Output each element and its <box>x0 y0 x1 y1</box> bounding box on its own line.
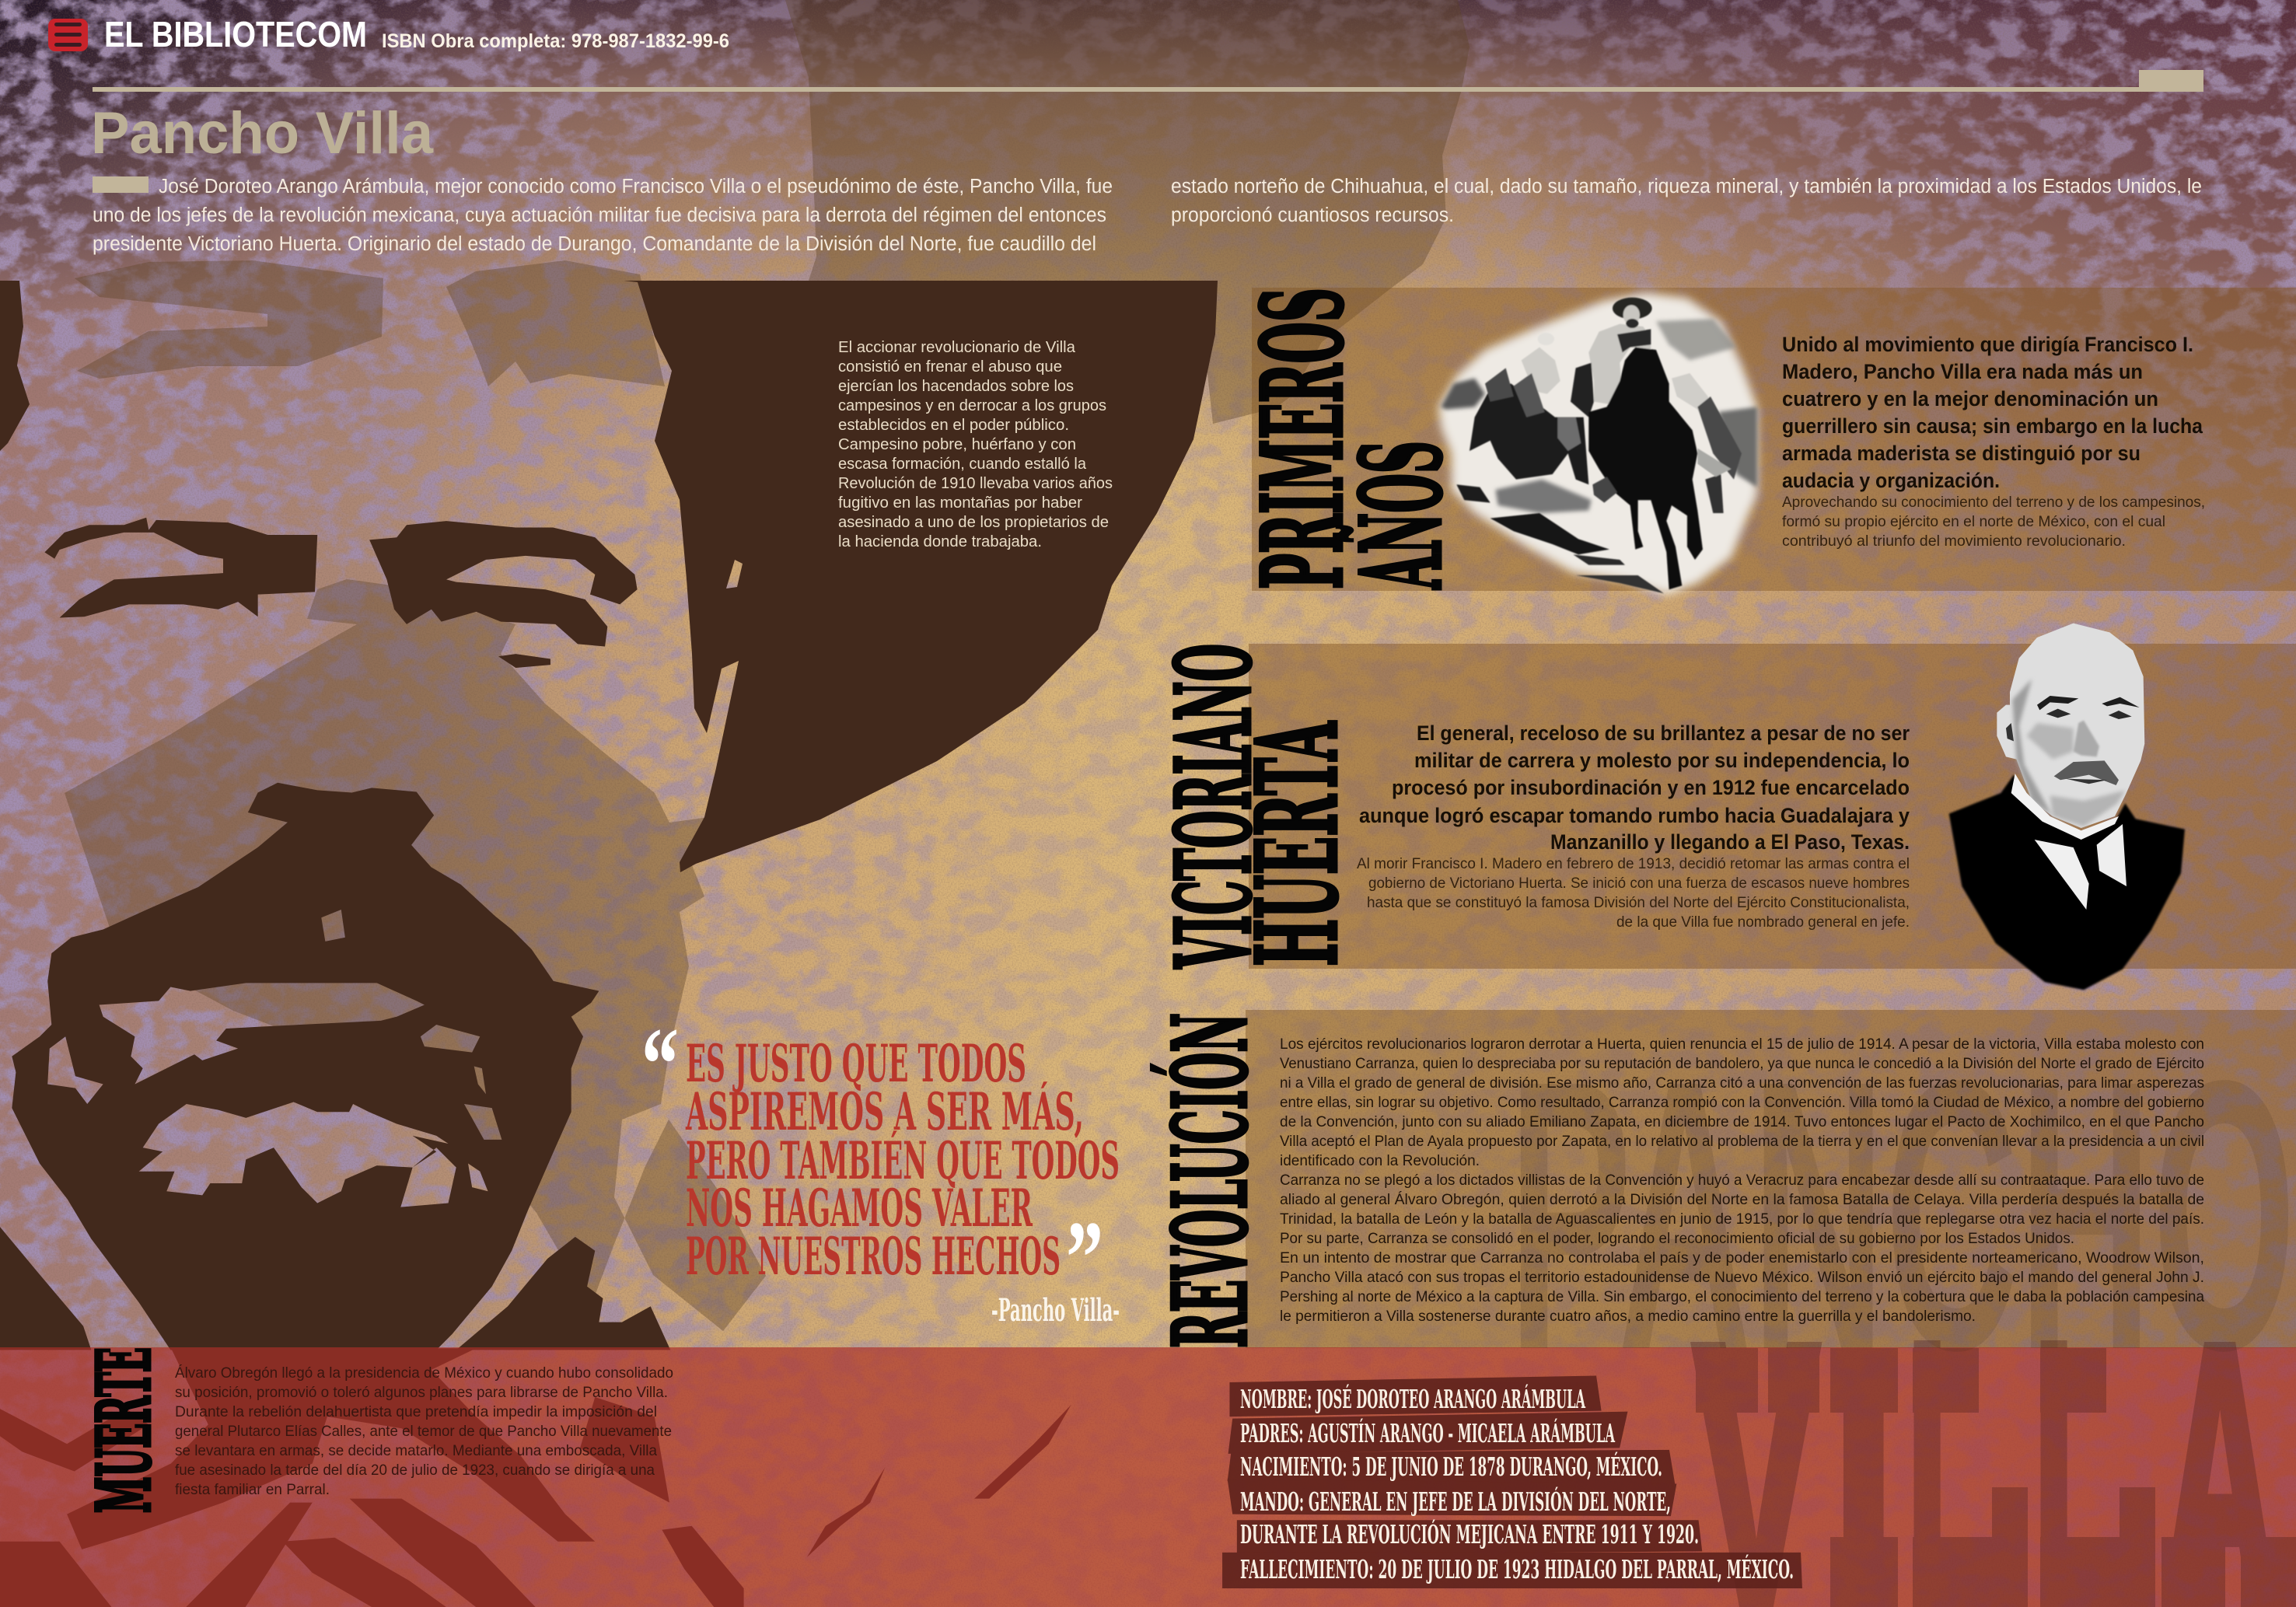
text block on dark shape <box>838 338 1113 550</box>
text: victoriano huerta: Manzanillo y llegando a El Paso, Texas. <box>1550 830 1910 854</box>
text block on dark shape: asesinado a uno de los propietarios de <box>838 513 1109 531</box>
text: MUERTE <box>82 1347 167 1513</box>
photo: Pancho Villa on horseback <box>1438 293 1757 595</box>
hat and cheek shadow <box>624 281 1218 872</box>
heading: victoriano huerta: HUERTA <box>1233 721 1362 966</box>
face illustration: dark silhouette <box>0 281 1218 1607</box>
fact sheet: DURANTE LA REVOLUCIÓN MEJICANA ENTRE 1911 Y 1920. <box>1240 1518 1699 1549</box>
text block on dark shape: la hacienda donde trabajaba. <box>838 533 1042 550</box>
quote: PERO TAMBIÉN QUE TODOS <box>686 1130 1120 1191</box>
text block on dark shape: Revolución de 1910 llevaba varios años <box>838 474 1113 492</box>
text: primeros años: contribuyó al triunfo del movimiento revolucionario. <box>1782 533 2126 550</box>
text: primeros años: formó su propio ejército en el norte de México, con el cual <box>1782 513 2165 530</box>
text: primeros años: Unido al movimiento que dirigía Francisco I. <box>1782 333 2193 356</box>
red band <box>0 1347 2296 1607</box>
fact sheet: MANDO: GENERAL EN JEFE DE LA DIVISIÓN DEL NORTE, <box>1240 1486 1671 1517</box>
text: victoriano huerta: de la que Villa fue nombrado general en jefe. <box>1616 914 1910 931</box>
text: revolución: aliado al general Álvaro Obregón, quien derrotó a la División del Norte en la famosa Batalla de Celaya. Villa perdería después la batalla de <box>1280 1190 2204 1208</box>
text block on dark shape: fugitivo en las montañas por haber <box>838 494 1082 512</box>
text block on dark shape: consistió en frenar el abuso que <box>838 358 1062 376</box>
collar left <box>0 1227 91 1350</box>
watermark: Villa <box>1693 1266 2296 1607</box>
quote: POR NUESTROS HECHOS <box>686 1226 1061 1287</box>
text: revolución: En un intento de mostrar que Carranza no controlaba el país y de poder enemistarlo con el presidente norteamericano, Woodrow Wilson, <box>1280 1249 2204 1266</box>
text: primeros años: armada maderista se distinguió por su <box>1782 442 2140 465</box>
text: revolución: identificado con la Revolución. <box>1280 1152 1480 1169</box>
fact sheet: FALLECIMIENTO: 20 DE JULIO DE 1923 HIDALGO DEL PARRAL, MÉXICO. <box>1240 1553 1794 1584</box>
intro paragraph: proporcionó cuantiosos recursos. <box>1171 204 1454 226</box>
quote: ” <box>1066 1200 1103 1316</box>
text block on dark shape: El accionar revolucionario de Villa <box>838 338 1076 356</box>
text: revolución: Trinidad, la batalla de León y la batalla de Aguascalientes en junio de 1915, por lo que tendría que replegarse otra vez hacia el norte del país. <box>1280 1210 2204 1228</box>
right eyebrow and eye <box>369 521 638 668</box>
text: victoriano huerta <box>1357 721 1910 931</box>
fact sheet: PADRES: AGUSTÍN ARANGO - MICAELA ARÁMBULA <box>1240 1417 1615 1448</box>
face illustration: mid tone shadows <box>65 0 1470 1331</box>
text block on dark shape: establecidos en el poder público. <box>838 416 1069 434</box>
fact sheet: NOMBRE: JOSÉ DOROTEO ARANGO ARÁMBULA <box>1240 1383 1585 1414</box>
intro paragraph: José Doroteo Arango Arámbula, mejor conocido como Francisco Villa o el pseudónimo de éste, Pancho Villa, fue <box>159 176 1113 197</box>
text: victoriano huerta: gobierno de Victoriano Huerta. Se inició con una fuerza de escasos nueve hombres <box>1368 875 1910 892</box>
fact sheet <box>1222 1375 1802 1588</box>
intro paragraph: estado norteño de Chihuahua, el cual, dado su tamaño, riqueza mineral, y también la proximidad a los Estados Unidos, le <box>1171 176 2202 197</box>
text: revolución: Pershing al norte de México a la captura de Villa. Sin embargo, el conocimiento del terreno y la cobertura que le daba la población campesina <box>1280 1288 2204 1305</box>
text: muerte: fue asesinado la tarde del día 20 de julio de 1923, cuando se dirigía a una <box>175 1462 655 1479</box>
header rule <box>93 70 2203 92</box>
text: victoriano huerta: militar de carrera y molesto por su independencia, lo <box>1414 749 1910 772</box>
text block on dark shape: ejercían los hacendados sobre los <box>838 377 1074 395</box>
text: revolución: de la Convención, junto con su aliado Emiliano Zapata, en diciembre de 1914. Tuvo entonces lugar el Pacto de Xochimilco, en el que Pancho <box>1280 1113 2204 1130</box>
panel: victoriano huerta background <box>1249 644 2296 969</box>
text: revolución: Venustiano Carranza, quien lo despreciaba por su reputación de bandolero, ya que nunca le concedió a la División del Norte el grado de Ejército <box>1280 1055 2204 1072</box>
text: revolución: Los ejércitos revolucionarios lograron derrotar a Huerta, quien renuncia el 15 de julio de 1914. A pesar de la victoria, Villa estaba molesto con <box>1280 1036 2204 1053</box>
text: victoriano huerta: hasta que se constituyó la famosa División del Norte del Ejército Constitucionalista, <box>1367 894 1910 911</box>
text: victoriano huerta: aunque logró escapar tomando rumbo hacia Guadalajara y <box>1359 804 1910 827</box>
text: muerte: fiesta familiar en Parral. <box>175 1481 330 1498</box>
text: primeros años <box>1782 333 2205 550</box>
text: muerte: se levantara en armas, se decide matarlo. Mediante una emboscada, Villa <box>175 1442 657 1459</box>
collar right <box>456 1237 670 1350</box>
fact sheet: NACIMIENTO: 5 DE JUNIO DE 1878 DURANGO, MÉXICO. <box>1240 1451 1662 1482</box>
text: revolución: Por su parte, Carranza se consolidó en el poder, logrando el reconocimiento oficial de su gobierno por los Estados Unidos. <box>1280 1230 2074 1247</box>
quote: NOS HAGAMOS VALER <box>686 1178 1033 1238</box>
text: revolución: Pancho Villa atacó con sus tropas el territorio estadounidense de Nuevo México. Wilson envió un ejército bajo el mando del general John J. <box>1280 1269 2204 1286</box>
quote <box>641 1007 1120 1329</box>
text: victoriano huerta: El general, receloso de su brillantez a pesar de no ser <box>1417 721 1910 745</box>
text: muerte: general Plutarco Elías Calles, ante el temor de que Pancho Villa nuevamente <box>175 1423 672 1440</box>
text: revolución: Villa aceptó el Plan de Ayala propuesto por Zapata, en lo relativo al problema de la tierra y en el que convenían llevar a la presidencia a un civil <box>1280 1133 2204 1150</box>
header: logo icon <box>48 19 88 51</box>
heading: primeros años <box>1239 288 1466 590</box>
text: primeros años: guerrillero sin causa; sin embargo en la lucha <box>1782 414 2203 438</box>
intro paragraph: uno de los jefes de la revolución mexicana, cuya actuación militar fue decisiva para la derrota del régimen del entonces <box>93 204 1106 226</box>
moustache and beard <box>0 783 670 1350</box>
quote: “ <box>641 1007 679 1123</box>
text: muerte <box>175 1364 673 1498</box>
text: VICTORIANO <box>1154 644 1274 969</box>
quote: ASPIREMOS A SER MÁS, <box>685 1081 1084 1142</box>
text: muerte: Álvaro Obregón llegó a la presidencia de México y cuando hubo consolidado <box>175 1364 673 1382</box>
intro paragraph: presidente Victoriano Huerta. Originario del estado de Durango, Comandante de la División del Norte, fue caudillo del <box>93 233 1096 255</box>
text: primeros años: Aprovechando su conocimiento del terreno y de los campesinos, <box>1782 494 2205 511</box>
left eyebrow and eye <box>44 518 317 618</box>
panel: primeros años background <box>1252 288 2296 591</box>
text: revolución: Carranza no se plegó a los dictados villistas de la Convención y huyó a Veracruz para encabezar desde allí su contraataque. Para ello tuvo de <box>1280 1172 2204 1189</box>
text: REVOLUCIÓN <box>1151 1013 1270 1348</box>
text: revolución: le permitieron a Villa sostenerse durante cuatro años, a medio camino entre la guerrilla y el bandolerismo. <box>1280 1308 1976 1325</box>
text: muerte: su posición, promovió o toleró algunos planes para librarse de Pancho Villa. <box>175 1384 668 1401</box>
header: brand name: EL BIBLIOTECOM <box>104 14 367 54</box>
text: victoriano huerta: Al morir Francisco I. Madero en febrero de 1913, decidió retomar las armas contra el <box>1357 855 1910 872</box>
heading: victoriano huerta <box>1154 644 1362 969</box>
photo: Victoriano Huerta portrait <box>1949 624 2185 990</box>
text: revolución <box>1280 1036 2204 1325</box>
text block on dark shape: escasa formación, cuando estalló la <box>838 455 1087 473</box>
quote: -Pancho Villa- <box>991 1292 1120 1329</box>
heading: primeros años: AÑOS <box>1337 441 1466 590</box>
text: primeros años: Madero, Pancho Villa era nada más un <box>1782 360 2143 383</box>
text: victoriano huerta: procesó por insubordinación y en 1912 fue encarcelado <box>1392 776 1910 799</box>
text block on dark shape: Campesino pobre, huérfano y con <box>838 435 1076 453</box>
quote: ES JUSTO QUE TODOS <box>686 1033 1026 1094</box>
title: Pancho Villa <box>91 100 434 166</box>
intro paragraph <box>93 176 2202 255</box>
panel: revolución background <box>1246 1010 2296 1348</box>
header: ISBN: ISBN Obra completa: 978-987-1832-99-6 <box>382 30 729 52</box>
text: revolución: ni a Villa el grado de general de división. Ese mismo año, Carranza citó a una convención de las fuerzas revolucionarias, para limar asperezas <box>1280 1074 2204 1092</box>
text: primeros años: cuatrero y en la mejor denominación un <box>1782 387 2158 410</box>
text block on dark shape: campesinos y en derrocar a los grupos <box>838 397 1106 414</box>
text: revolución: entre ellas, sin lograr su objetivo. Como resultado, Carranza rompió con la Convención. Villa tomó la Ciudad de México, a nombre del gobierno <box>1280 1094 2204 1111</box>
text: muerte: Durante la rebelión delahuertista que pretendía impedir la imposición del <box>175 1403 657 1420</box>
chest shapes under the red band <box>0 1348 1071 1607</box>
text: primeros años: audacia y organización. <box>1782 469 2000 492</box>
left edge shadow <box>0 281 30 451</box>
